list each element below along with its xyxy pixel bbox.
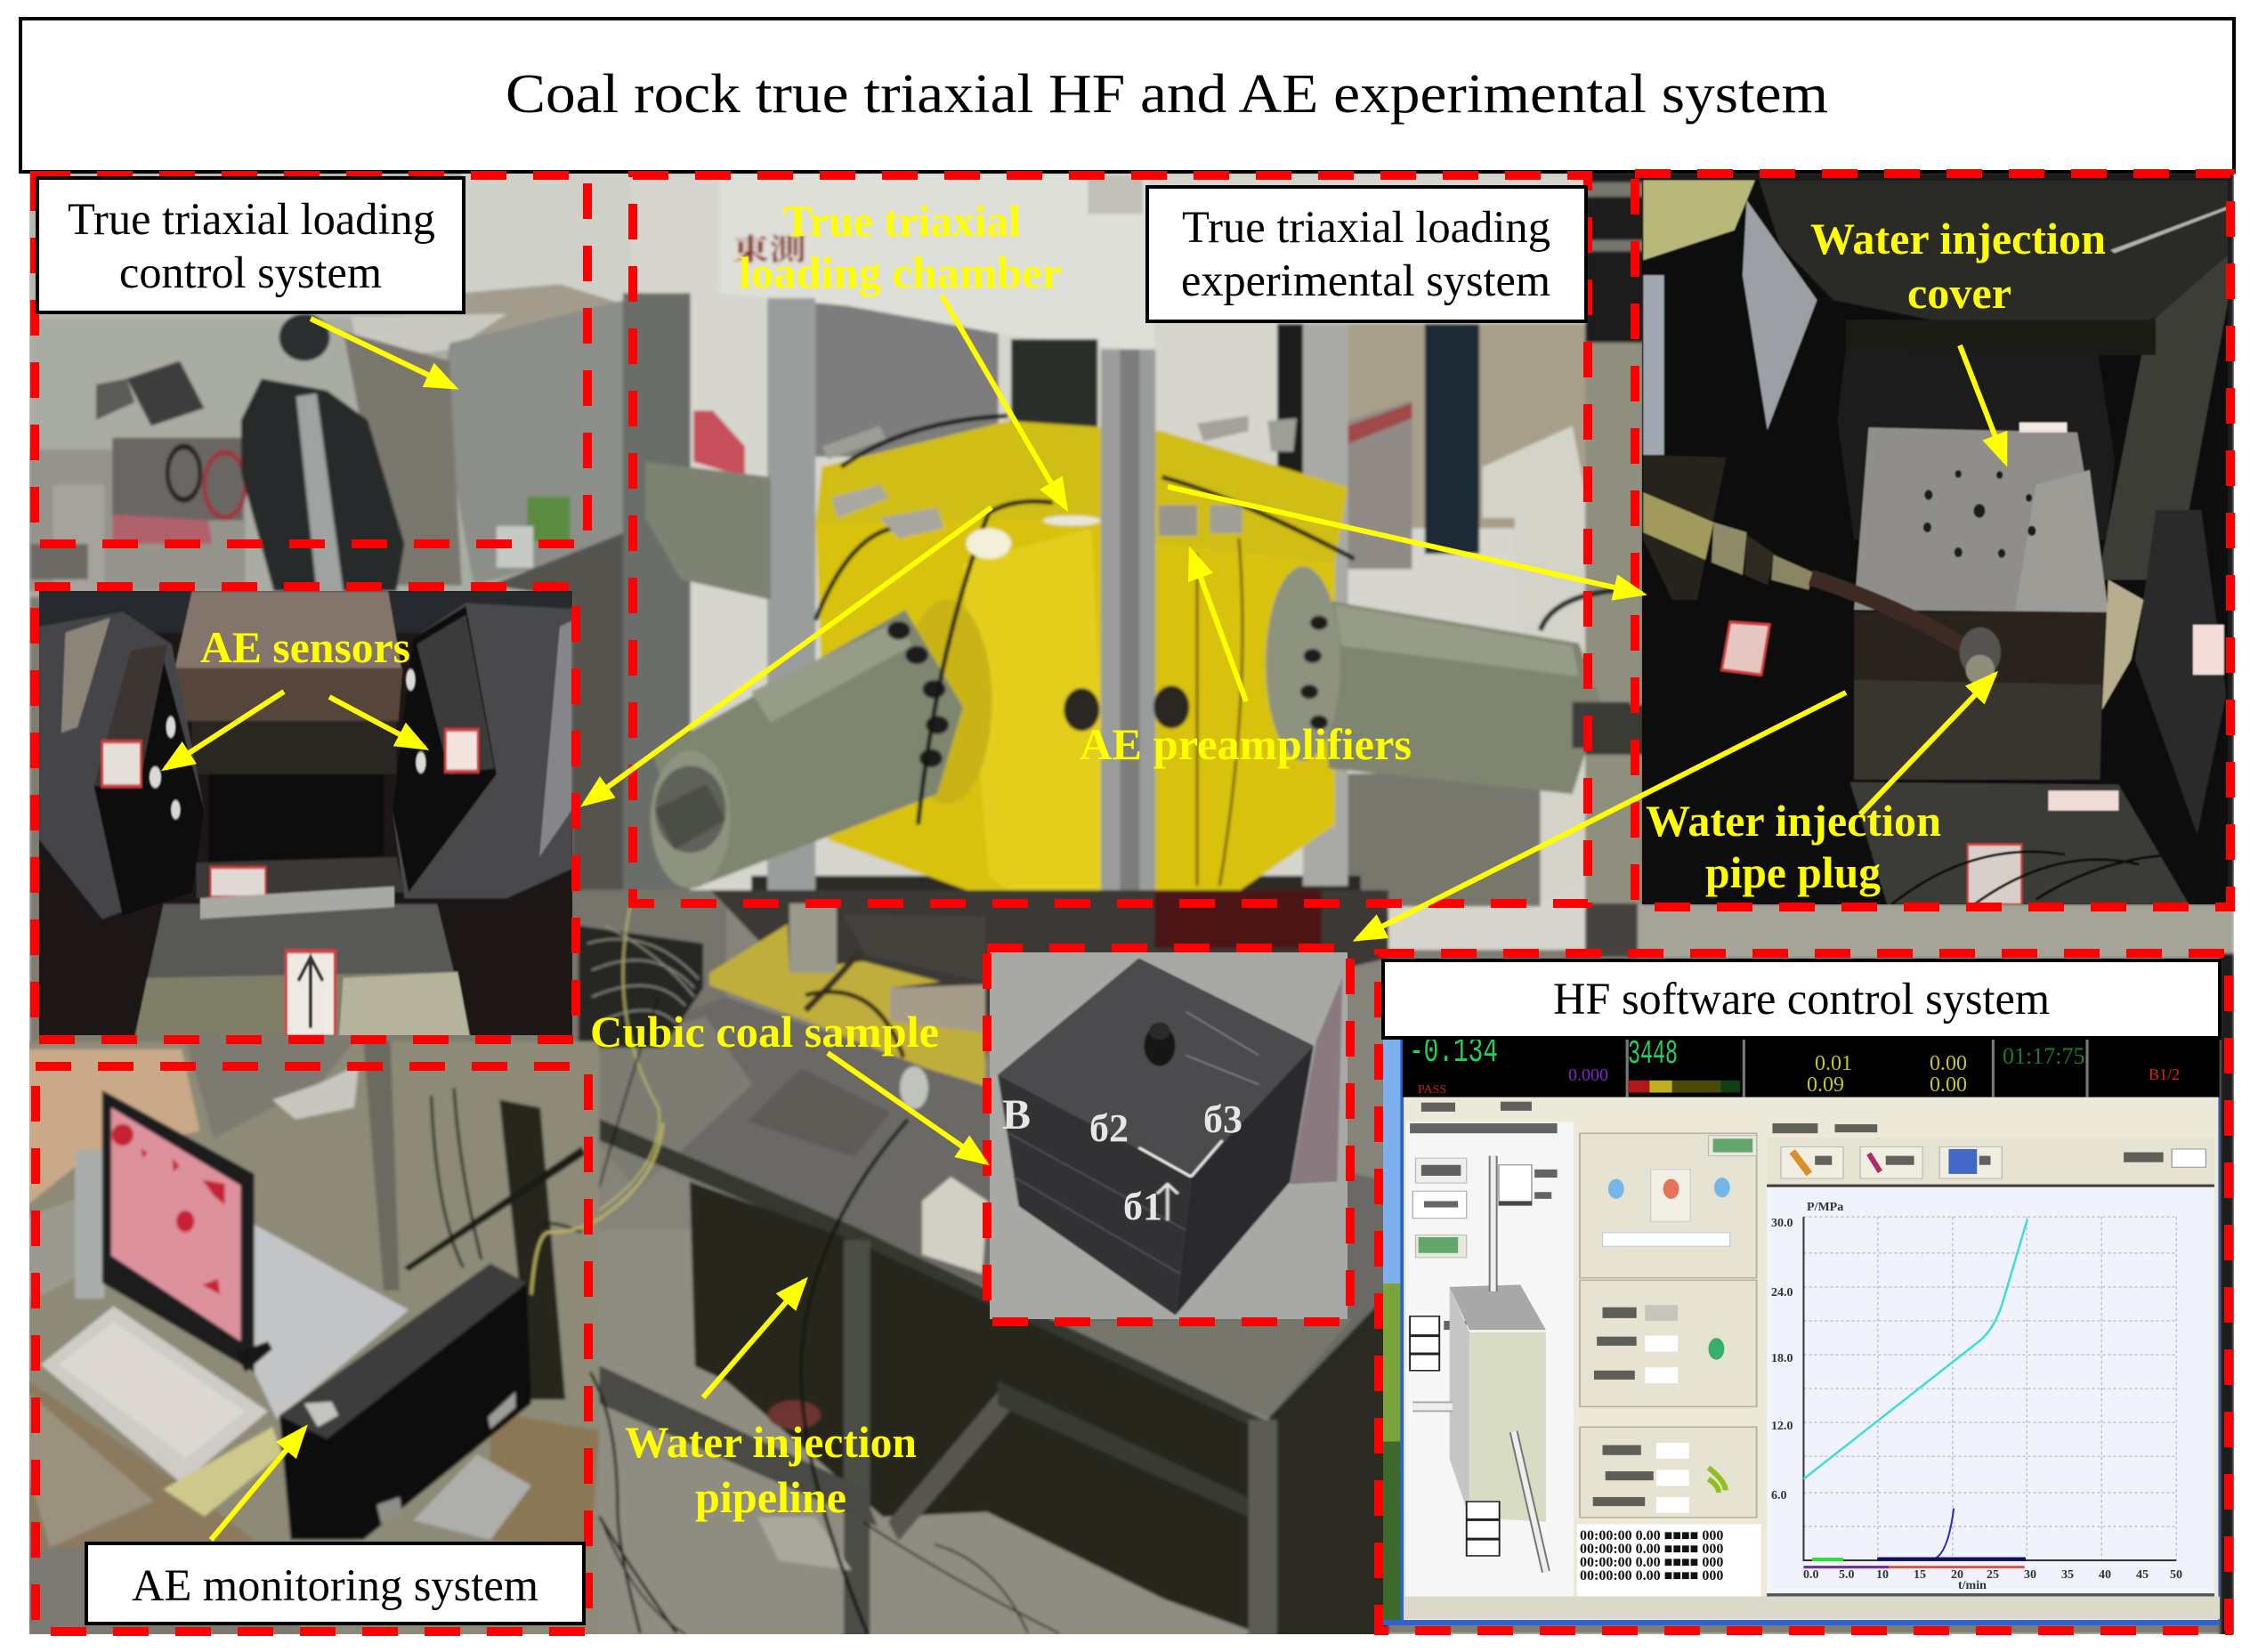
label: true triaxial loading experimental system: experimental system	[1181, 256, 1550, 306]
arrow: to water injection cover	[1960, 345, 2005, 462]
arrow: to left AE sensor	[166, 692, 284, 768]
arrow: to water injection pipeline	[703, 1281, 805, 1397]
label: HF software control system: HF software control system	[1553, 975, 2050, 1024]
yellow label: water injection pipe plug: Water injection	[1646, 796, 1941, 846]
dashed box: AE sensors	[35, 587, 576, 1040]
screen readouts: 01:17:75	[2003, 1043, 2084, 1069]
title box: Coal rock true triaxial HF and AE experimental system	[506, 64, 1828, 125]
chart axis and log text: 18.0	[1771, 1352, 1793, 1365]
chart axis and log text: 00:00:00 0.00 ■■■■ 000	[1580, 1555, 1723, 1570]
chalk marks on coal sample: б2	[1089, 1106, 1129, 1150]
yellow label: water injection cover: Water injection	[1810, 214, 2106, 263]
chart axis and log text: 00:00:00 0.00 ■■■■ 000	[1580, 1528, 1723, 1543]
chalk marks on coal sample	[1002, 1100, 1241, 1219]
yellow label: water injection pipe plug: pipe plug	[1705, 847, 1881, 897]
yellow label: water injection pipeline: pipeline	[695, 1472, 846, 1522]
dashed box: true triaxial loading control system	[35, 175, 587, 544]
yellow label: true triaxial loading chamber	[739, 196, 1062, 297]
screen readouts: 0.00	[1930, 1052, 1967, 1075]
chalk marks on coal sample: б1	[1123, 1185, 1162, 1228]
label: true triaxial loading experimental system: True triaxial loading	[1182, 203, 1550, 253]
dashed box: HF software control system	[1379, 953, 2229, 1631]
label: true triaxial loading control system	[37, 178, 464, 312]
label: true triaxial loading experimental system	[1147, 187, 1586, 321]
chart axis and log text: P/MPa	[1807, 1201, 1843, 1214]
table tensile details: yellow machine base and cable tangle	[570, 899, 1059, 1634]
dashed box: true triaxial loading experimental system	[633, 175, 1588, 903]
yellow label: AE sensors: AE sensors	[200, 622, 410, 672]
chalk marks on coal sample: б3	[1203, 1097, 1242, 1141]
chalk marks on coal sample: B	[1002, 1091, 1031, 1138]
control buttons	[1412, 1136, 2205, 1513]
arrow: to control system cabinet	[311, 319, 454, 387]
arrow: chamber sensors to AE sensors inset	[585, 507, 991, 804]
arrow: to water injection pipe plug	[1860, 675, 1995, 814]
chart axis and log text: 35	[2061, 1568, 2074, 1582]
pressure chart	[1803, 1217, 2176, 1567]
chart axis and log text: 25	[1987, 1568, 1999, 1582]
chart axis and log text: 0.0	[1803, 1568, 1819, 1582]
blurred interface text	[1410, 1102, 2164, 1506]
arrow: to cubic coal sample inset	[828, 1053, 985, 1162]
loading cuboid diagram	[1410, 1156, 1546, 1572]
yellow label: water injection pipe plug	[1646, 796, 1941, 897]
label: HF software control system	[1383, 960, 2220, 1038]
chart axis and log text: 45	[2136, 1568, 2149, 1582]
chart axis and log text: 24.0	[1771, 1286, 1793, 1300]
screen readouts: PASS	[1418, 1083, 1446, 1097]
yellow label: AE preamplifiers: AE preamplifiers	[1080, 719, 1412, 769]
arrow: to loading chamber	[942, 296, 1065, 507]
screen readouts	[1413, 1040, 2179, 1093]
photo: cubic coal sample inset	[982, 949, 1353, 1325]
chart axis and log text	[1580, 1201, 2182, 1592]
chart axis and log text: 00:00:00 0.00 ■■■■ 000	[1580, 1542, 1723, 1557]
yellow label: true triaxial loading chamber: True triaxial	[783, 196, 1021, 246]
label: true triaxial loading control system: control system	[119, 248, 382, 298]
arrow: inset to coal sample area	[1357, 692, 1846, 939]
yellow label: water injection cover	[1810, 214, 2106, 318]
chart axis and log text: 50	[2170, 1568, 2182, 1582]
chart axis and log text: 30.0	[1771, 1217, 1793, 1230]
title box	[20, 19, 2234, 172]
chart axis and log text: 15	[1914, 1568, 1926, 1582]
photo: AE sensors inset	[36, 588, 576, 1040]
screen readouts: 0.09	[1807, 1073, 1844, 1097]
chart axis and log text: t/min	[1958, 1579, 1987, 1592]
chart axis and log text: 12.0	[1771, 1420, 1793, 1433]
chart axis and log text: 5.0	[1839, 1568, 1855, 1582]
label: AE monitoring system	[86, 1543, 584, 1624]
yellow label: water injection cover: cover	[1907, 268, 2011, 318]
chart axis and log text: 30	[2024, 1568, 2036, 1582]
screen readouts: -0.134	[1409, 1032, 1498, 1073]
yellow label: cubic coal sample: Cubic coal sample	[590, 1007, 939, 1057]
dashed box: water injection cover	[1635, 174, 2230, 907]
chart axis and log text: 10	[1876, 1568, 1889, 1582]
screen readouts: 0.01	[1815, 1052, 1852, 1075]
chart axis and log text: 6.0	[1771, 1489, 1787, 1502]
screen readouts: 0.000	[1568, 1065, 1608, 1085]
arrow: to AE monitoring computer	[211, 1429, 304, 1540]
yellow label: water injection pipeline: Water injection	[625, 1417, 917, 1467]
chart axis and log text: 40	[2099, 1568, 2111, 1582]
label: true triaxial loading control system: True triaxial loading	[68, 195, 435, 245]
label: AE monitoring system: AE monitoring system	[132, 1561, 538, 1611]
screen readouts: B1/2	[2149, 1065, 2180, 1083]
arrow: chamber to water injection inset	[1168, 487, 1642, 594]
dashed box: cubic coal sample	[987, 948, 1350, 1322]
dashed box: AE monitoring system	[36, 1066, 588, 1632]
panel: HF software control screen	[1379, 1032, 2224, 1626]
photo: laboratory scene background: 東測	[732, 234, 806, 267]
chart axis and log text: 00:00:00 0.00 ■■■■ 000	[1580, 1568, 1723, 1583]
screen readouts: 3448	[1628, 1035, 1678, 1073]
photo: water injection cover inset	[1639, 175, 2230, 910]
arrow: to right AE sensor	[329, 697, 425, 748]
chart axis and log text: 20	[1951, 1568, 1963, 1582]
arrow: to AE preamplifiers	[1191, 551, 1246, 701]
screen readouts: 0.00	[1930, 1073, 1967, 1097]
yellow label: water injection pipeline	[625, 1417, 917, 1522]
yellow label: true triaxial loading chamber: loading chamber	[739, 247, 1062, 297]
